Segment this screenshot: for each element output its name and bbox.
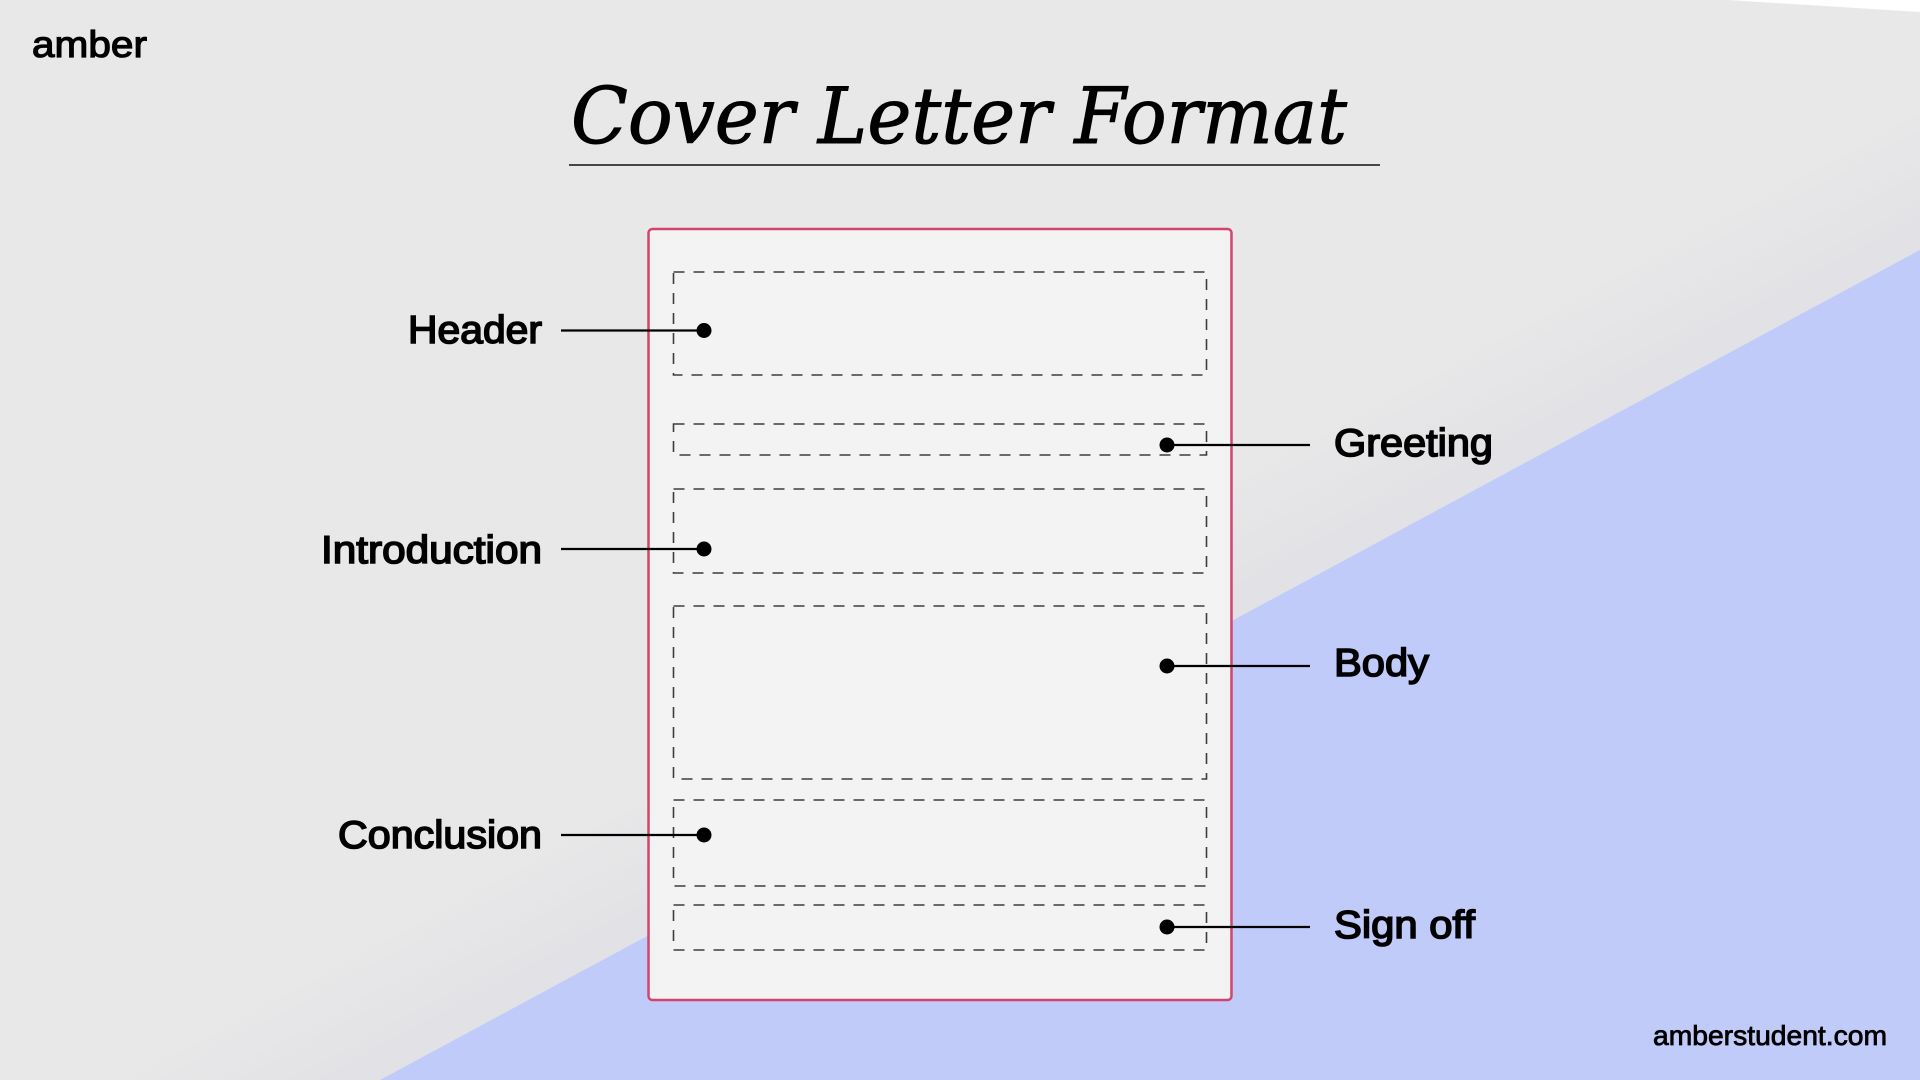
callout: Sign off (1160, 904, 1475, 947)
title: Cover Letter Format (571, 72, 1348, 162)
panel: cover letter page (648, 229, 1232, 1000)
callout: Conclusion (338, 814, 712, 857)
background: white top-right corner (1728, 0, 1920, 12)
section box: body (674, 606, 1206, 779)
section box: greeting (674, 424, 1206, 455)
logo: amber: amber (32, 24, 147, 65)
callout: Sign off: Sign off (1334, 904, 1475, 947)
callout: Header (408, 309, 712, 352)
section box: conclusion (674, 800, 1206, 886)
callout: Conclusion: Conclusion (338, 814, 542, 857)
section box: header (674, 272, 1206, 375)
callout: Introduction (321, 529, 712, 572)
callout: Greeting (1160, 422, 1493, 465)
callout: Header: Header (408, 309, 542, 352)
callout: Body: Body (1334, 642, 1430, 685)
background: blue diagonal area (380, 250, 1920, 1080)
callout: Introduction: Introduction (321, 529, 542, 572)
callout: Greeting: Greeting (1334, 422, 1493, 465)
callout: Body (1160, 642, 1430, 685)
section box: sign off (674, 905, 1206, 950)
footer: website: amberstudent.com (1653, 1020, 1887, 1051)
section box: introduction (674, 489, 1206, 573)
